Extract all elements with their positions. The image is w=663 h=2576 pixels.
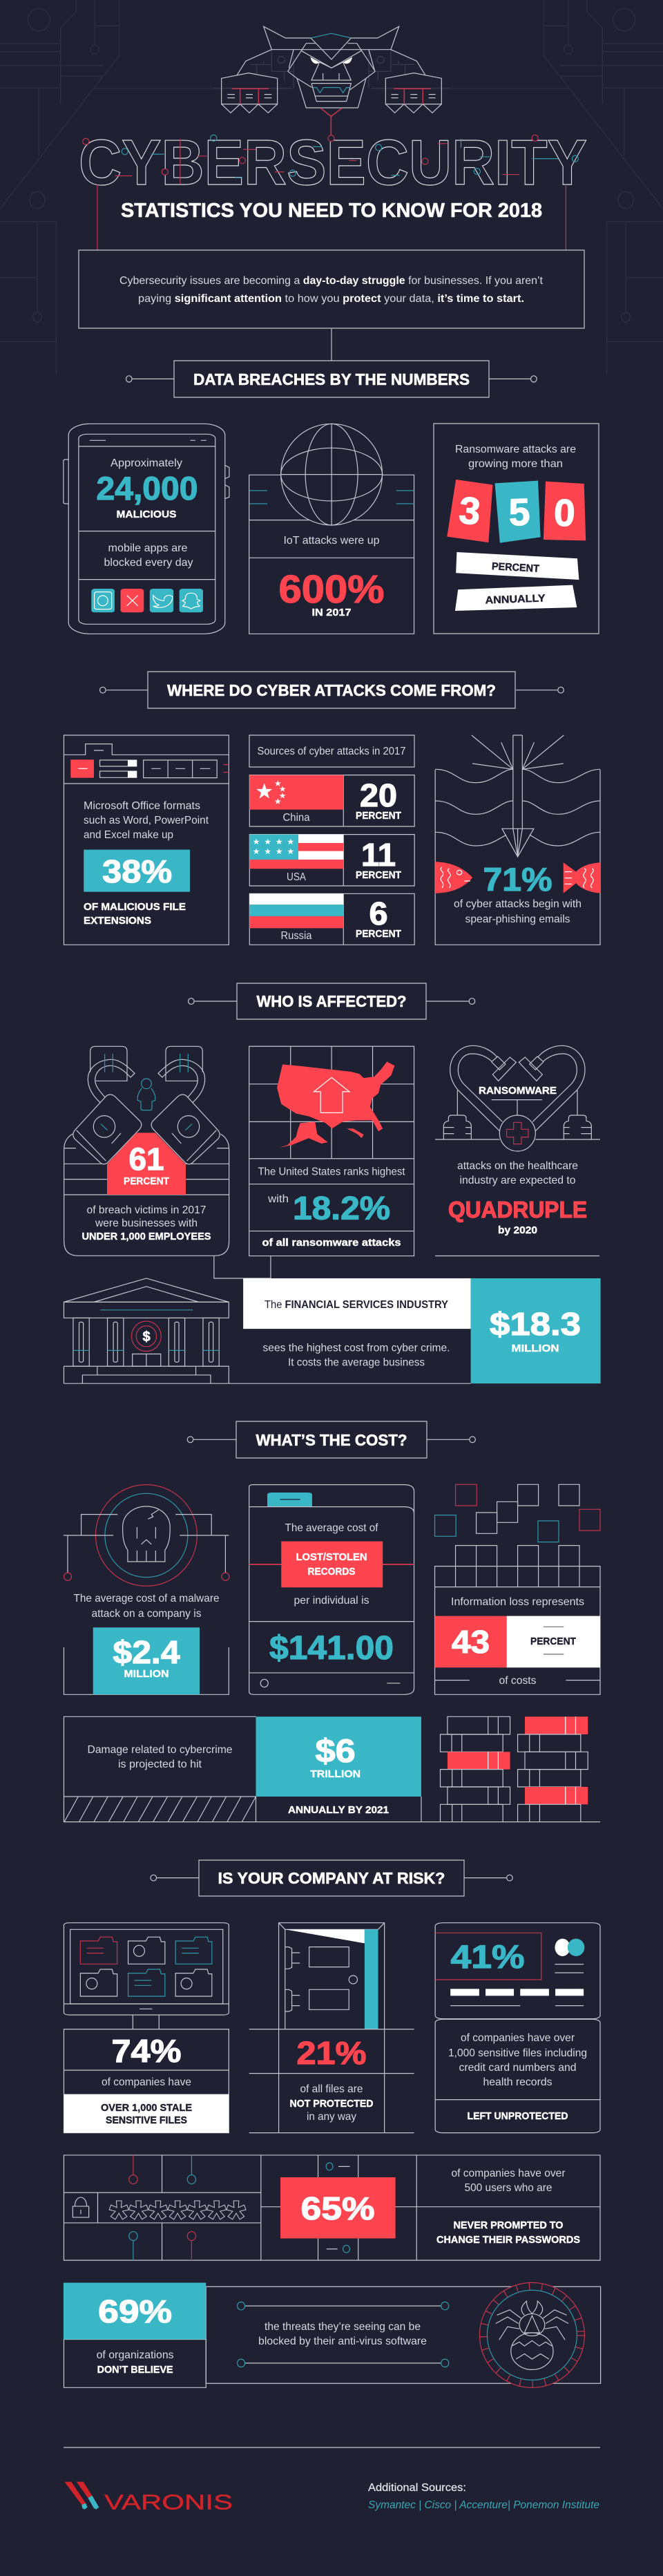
frames and connector lines	[64, 2283, 601, 2387]
text: of costs: of costs	[499, 1675, 536, 1687]
number: 38%: 38%	[102, 853, 172, 889]
number: $18.3: $18.3	[490, 1306, 581, 1342]
text: blocked every day: blocked every day	[104, 557, 193, 569]
digit 3: 3	[457, 489, 482, 533]
text: ransomware attacks: Ransomware attacks are	[455, 444, 576, 455]
text: left unprotected: LEFT UNPROTECTED	[467, 2110, 568, 2122]
row: russia: Russia	[280, 930, 312, 942]
panel: lost or stolen records	[249, 1485, 414, 1694]
text: average cost malware: The average cost of a malware	[73, 1593, 220, 1604]
row: usa: PERCENT	[356, 869, 401, 881]
title circuit connectors	[83, 135, 578, 250]
heading: where do attacks come from	[100, 672, 564, 708]
text: don't believe: DON’T BELIEVE	[97, 2364, 173, 2376]
icon: scattered blocks	[435, 1484, 600, 1694]
panel: spear phishing	[435, 735, 600, 945]
icon: office window	[64, 735, 229, 945]
tiles and banners	[447, 480, 586, 611]
text: damage related: Damage related to cybercrime	[87, 1744, 233, 1756]
text: lost/stolen: LOST/STOLEN	[296, 1551, 367, 1563]
panel: credit card files	[435, 1923, 600, 2133]
text: in 2017: IN 2017	[312, 607, 351, 618]
icon: folder tablet	[249, 1485, 414, 1694]
text: industry expected: industry are expected to	[460, 1175, 576, 1186]
row: usa: USA	[287, 871, 306, 883]
text: spear-phishing: spear-phishing emails	[465, 913, 570, 925]
text: percent: PERCENT	[124, 1175, 169, 1187]
panel: healthcare ransomware	[435, 1045, 600, 1256]
bottom rule of healthcare panel	[435, 1255, 599, 1256]
heading: data breaches: DATA BREACHES BY THE NUMBERS	[193, 370, 470, 388]
text: blocked by anti-virus: blocked by their anti-virus software	[258, 2336, 427, 2347]
number: 74%: 74%	[112, 2033, 181, 2069]
text: united states ranks: The United States ranks highest	[258, 1166, 405, 1177]
text: records: RECORDS	[308, 1566, 355, 1578]
text: IoT attacks: IoT attacks were up	[283, 535, 380, 547]
heading: who is affected	[189, 983, 475, 1019]
text: average cost of: The average cost of	[285, 1522, 378, 1534]
panel: $6 trillion	[64, 1716, 600, 1822]
subtitle: STATISTICS YOU NEED TO KNOW FOR 2018	[121, 200, 542, 222]
row: russia: PERCENT	[356, 928, 401, 940]
text: 500 users: 500 users who are	[464, 2182, 552, 2194]
number: $6: $6	[316, 1732, 356, 1769]
text: attack on a company: attack on a company is	[91, 1608, 202, 1620]
text: excel: and Excel make up	[84, 829, 173, 841]
row: china: 20	[360, 777, 397, 813]
frame, hatching and stacked blocks	[64, 1716, 600, 1822]
text: health records: health records	[483, 2076, 552, 2088]
text: by 2020: by 2020	[498, 1224, 537, 1236]
text: credit card: credit card numbers and	[459, 2062, 576, 2074]
icon: spider badge	[479, 2282, 584, 2387]
text: mobile apps: mobile apps are	[108, 542, 188, 554]
sources caption box	[249, 735, 414, 767]
heading: who is affected: WHO IS AFFECTED?	[257, 992, 406, 1010]
number: 61: 61	[128, 1142, 164, 1177]
text: of cyber attacks: of cyber attacks begin with	[454, 898, 582, 910]
number: $2.4: $2.4	[113, 1634, 180, 1670]
text: never prompted: NEVER PROMPTED TO	[453, 2219, 564, 2231]
panel: passwords	[64, 2155, 600, 2260]
icon: open door	[249, 1923, 414, 2133]
number: $141.00: $141.00	[269, 1630, 394, 1667]
panel: malicious file extensions	[64, 735, 229, 945]
text: million: MILLION	[511, 1343, 559, 1354]
icon: monitor with folders	[64, 1923, 229, 2133]
text: malicious: MALICIOUS	[116, 509, 177, 520]
text: under 1000 employees: UNDER 1,000 EMPLOYEES	[81, 1231, 211, 1242]
number: 41%: 41%	[450, 1938, 525, 1975]
text: extensions: EXTENSIONS	[84, 915, 151, 927]
digit 0: 0	[553, 491, 576, 535]
text: not protected: NOT PROTECTED	[290, 2098, 374, 2110]
text: trillion: TRILLION	[310, 1768, 361, 1780]
row: china: PERCENT	[356, 810, 401, 822]
text: annually by 2021: ANNUALLY BY 2021	[288, 1804, 389, 1816]
text: were businesses: were businesses with	[95, 1218, 198, 1229]
text: additional sources: Additional Sources:	[368, 2482, 466, 2494]
frame, lock and connectors	[64, 2155, 600, 2260]
text: office formats: Microsoft Office formats	[84, 800, 200, 812]
panel: not protected	[249, 1923, 414, 2133]
title: CYBERSECURITY	[79, 126, 587, 198]
password asterisks: *******	[109, 2191, 246, 2246]
text: annually: ANNUALLY	[485, 592, 546, 607]
text: with: with	[267, 1193, 289, 1205]
text: of companies have: of companies have	[102, 2076, 191, 2088]
number: 21%: 21%	[297, 2035, 366, 2071]
number: 43: 43	[452, 1624, 490, 1660]
text: million: MILLION	[124, 1668, 169, 1680]
logo: varonis	[64, 2482, 233, 2515]
text: percent: PERCENT	[530, 1636, 576, 1647]
text: dollar in medal: $	[142, 1329, 151, 1345]
icon: padlocks and person	[64, 1046, 229, 1256]
row: usa	[287, 837, 401, 883]
connector intro to heading	[331, 328, 332, 361]
text: word powerpoint: such as Word, PowerPoint	[84, 815, 209, 826]
text: change passwords: CHANGE THEIR PASSWORDS	[436, 2234, 580, 2246]
number: 69%: 69%	[98, 2293, 172, 2329]
row: china	[283, 777, 401, 824]
text: percent: PERCENT	[492, 560, 539, 575]
text: sees the highest cost: sees the highest cost from cyber crime.	[262, 1342, 450, 1354]
icon: bank building	[64, 1256, 601, 1383]
intro text line 2: paying significant attention to how you protect your data, it’s time to start.	[138, 293, 524, 305]
digit 5: 5	[508, 490, 530, 534]
heading: is your company at risk	[151, 1860, 512, 1896]
panel: financial services	[64, 1256, 601, 1383]
text: financial services industry: The FINANCIAL SERVICES INDUSTRY	[265, 1299, 448, 1311]
text: source list: Symantec | Cisco | Accenture| Ponemon Institute	[368, 2499, 599, 2511]
text: it costs: It costs the average business	[288, 1357, 425, 1368]
icon: globe with panel frame	[249, 424, 414, 634]
text: of breach victims: of breach victims in 2017	[87, 1204, 206, 1216]
row: russia	[280, 896, 401, 942]
intro text line 1: Cybersecurity issues are becoming a day-to-day struggle for businesses. If you aren’t	[119, 275, 544, 287]
panel: sources by country	[249, 735, 414, 945]
footer divider	[64, 2447, 600, 2448]
panel: anti-virus	[64, 2282, 601, 2387]
heading: what's the cost: WHAT’S THE COST?	[256, 1431, 407, 1449]
text: sensitive files: SENSITIVE FILES	[106, 2114, 187, 2126]
icon: heart stethoscope	[435, 1045, 600, 1151]
background circuit pattern left	[0, 0, 215, 375]
sources caption box: Sources of cyber attacks in 2017	[257, 746, 406, 757]
panel: breach victims	[64, 1046, 229, 1256]
panel: IoT attacks	[249, 424, 414, 634]
text: of malicious file: OF MALICIOUS FILE	[84, 901, 186, 913]
heading: what's the cost	[187, 1421, 475, 1458]
icon: phone outline	[64, 424, 229, 634]
text: ransomware label: RANSOMWARE	[479, 1085, 557, 1097]
text: sensitive files: 1,000 sensitive files including	[448, 2047, 587, 2059]
logo: varonis: VARONIS	[104, 2490, 233, 2515]
number: 65%: 65%	[301, 2190, 374, 2226]
panel: malware cost	[64, 1485, 229, 1694]
flags and frames	[249, 775, 414, 945]
text: of all ransomware: of all ransomware attacks	[262, 1237, 401, 1249]
row: china: China	[283, 812, 310, 824]
panel: stale files	[64, 1923, 229, 2133]
text: in any way: in any way	[307, 2111, 356, 2123]
row: usa: 11	[361, 837, 396, 873]
icon: cyber monster	[214, 26, 449, 135]
sources	[368, 2482, 599, 2511]
heading: where do attacks come from: WHERE DO CYBER ATTACKS COME FROM?	[167, 681, 496, 699]
number: 18.2%: 18.2%	[293, 1190, 390, 1226]
row: russia: 6	[369, 896, 388, 931]
background circuit pattern right	[448, 0, 663, 375]
number: 600%: 600%	[279, 567, 384, 612]
number: 24,000: 24,000	[97, 470, 198, 506]
text: companies over: of companies have over	[461, 2032, 575, 2044]
text: threats: the threats they’re seeing can be	[265, 2321, 421, 2333]
heading: data breaches	[126, 361, 537, 397]
text: quadruple: QUADRUPLE	[448, 1197, 587, 1222]
text: per individual: per individual is	[294, 1595, 369, 1607]
text: projected to hit: is projected to hit	[118, 1759, 202, 1770]
panel: mobile apps	[64, 424, 229, 634]
intro box	[79, 250, 584, 328]
text: approximately: Approximately	[110, 457, 182, 469]
panel: united states ransomware	[249, 1046, 414, 1256]
text: over 1000 stale: OVER 1,000 STALE	[101, 2102, 192, 2114]
heading: is your company at risk: IS YOUR COMPANY AT RISK?	[218, 1869, 445, 1887]
number: 71%: 71%	[483, 861, 552, 898]
text: attacks on healthcare: attacks on the healthcare	[457, 1160, 578, 1172]
icon: skull with circuit	[64, 1485, 229, 1694]
text: of organizations: of organizations	[97, 2349, 174, 2361]
panel: information loss	[435, 1484, 600, 1694]
icon: spear, waves and fish	[435, 735, 600, 945]
icon: us map on grid	[249, 1046, 414, 1256]
panel: ransomware growth	[434, 424, 599, 634]
text: companies over: of companies have over	[452, 2168, 566, 2179]
text: information loss: Information loss represents	[451, 1596, 584, 1608]
text: of all files: of all files are	[300, 2083, 363, 2095]
text: growing more than: growing more than	[468, 458, 563, 470]
icon: credit card	[435, 1923, 600, 2133]
